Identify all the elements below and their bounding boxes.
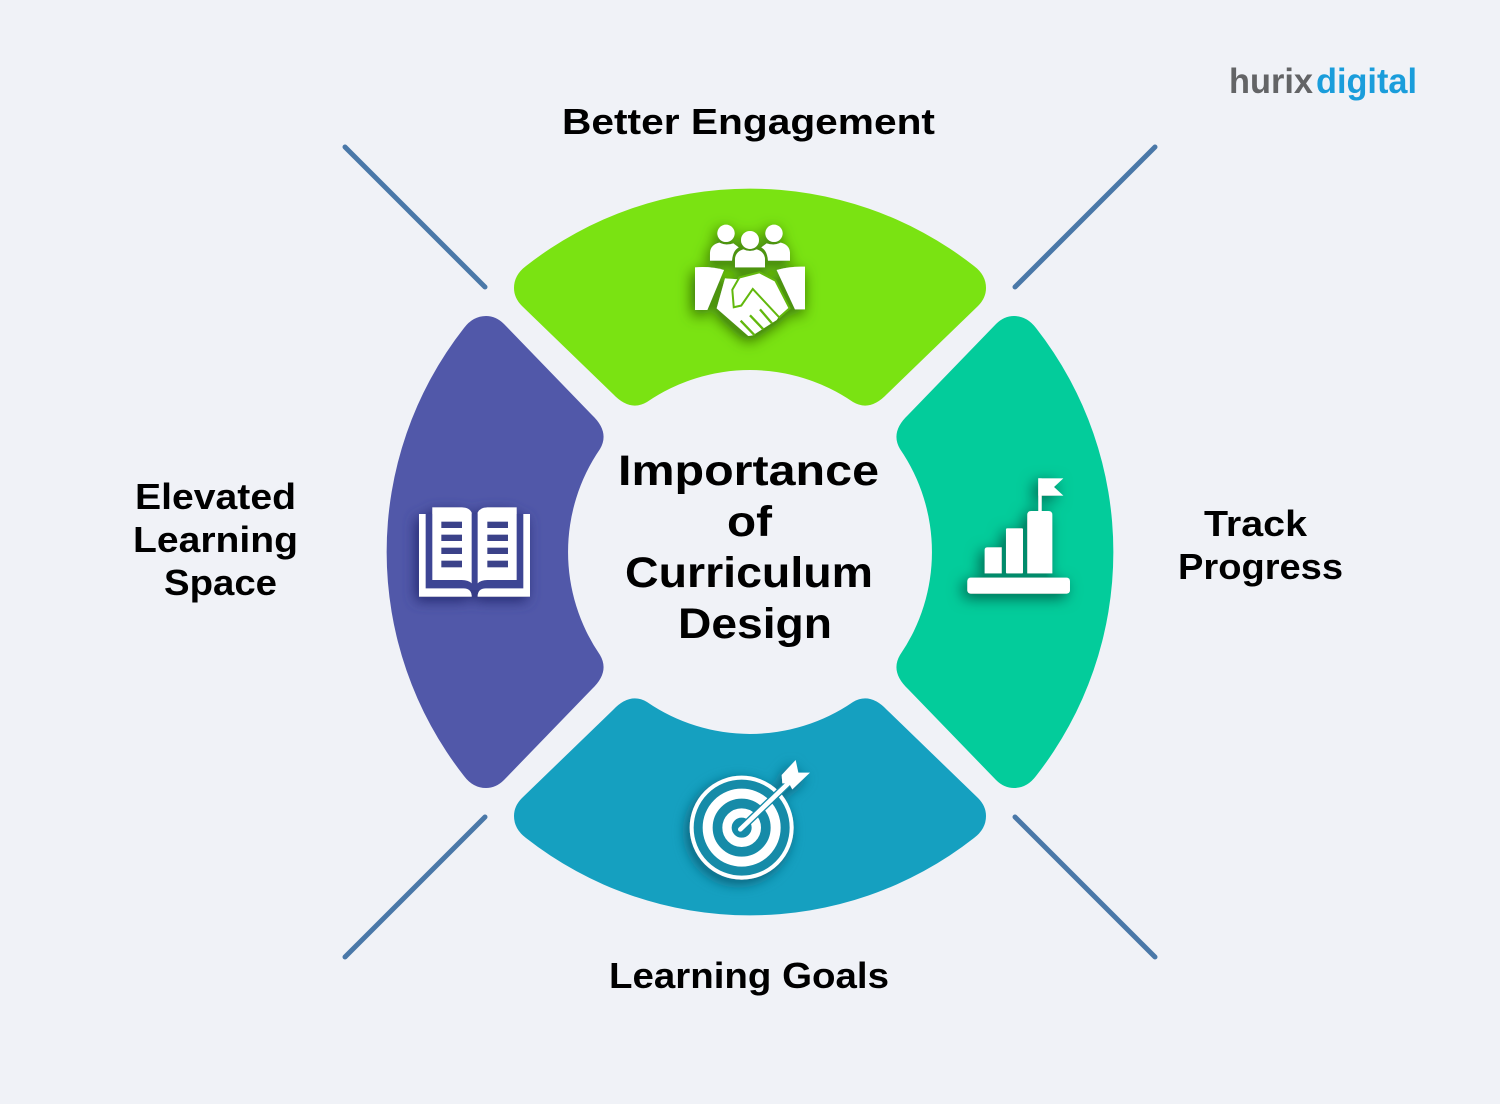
icon: open book — [419, 507, 530, 597]
icon: bar chart with flag — [967, 478, 1070, 594]
label: Elevated Learning Space: Elevated — [135, 476, 296, 517]
segment: left purple — [387, 316, 604, 788]
connector line: bottom left — [345, 817, 485, 957]
segment: top green — [514, 189, 986, 406]
heading: center title — [618, 447, 879, 648]
icon: team and handshake — [695, 225, 805, 336]
logo: hurix digital: digital — [1316, 62, 1417, 101]
label: Elevated Learning Space: Space — [164, 562, 277, 603]
connector line: top left — [345, 147, 485, 287]
logo: hurix digital: hurix — [1229, 62, 1314, 101]
icon: target with arrow — [692, 760, 810, 878]
heading: center title: of — [727, 498, 773, 546]
heading: center title: Importance — [618, 447, 879, 495]
label: Better Engagement: Better Engagement — [562, 101, 935, 142]
label: Elevated Learning Space — [133, 476, 298, 603]
label: Elevated Learning Space: Learning — [133, 519, 298, 560]
heading: center title: Design — [678, 600, 832, 648]
heading: center title: Curriculum — [625, 549, 873, 597]
label: Track Progress: Progress — [1178, 546, 1343, 587]
segment: right teal green — [896, 316, 1113, 788]
connector line: top right — [1015, 147, 1155, 287]
connector line: bottom right — [1015, 817, 1155, 957]
segment: bottom blue — [514, 698, 986, 915]
logo: hurix digital — [1229, 62, 1417, 101]
label: Track Progress — [1178, 503, 1343, 587]
label: Learning Goals: Learning Goals — [609, 955, 889, 996]
label: Track Progress: Track — [1204, 503, 1308, 544]
